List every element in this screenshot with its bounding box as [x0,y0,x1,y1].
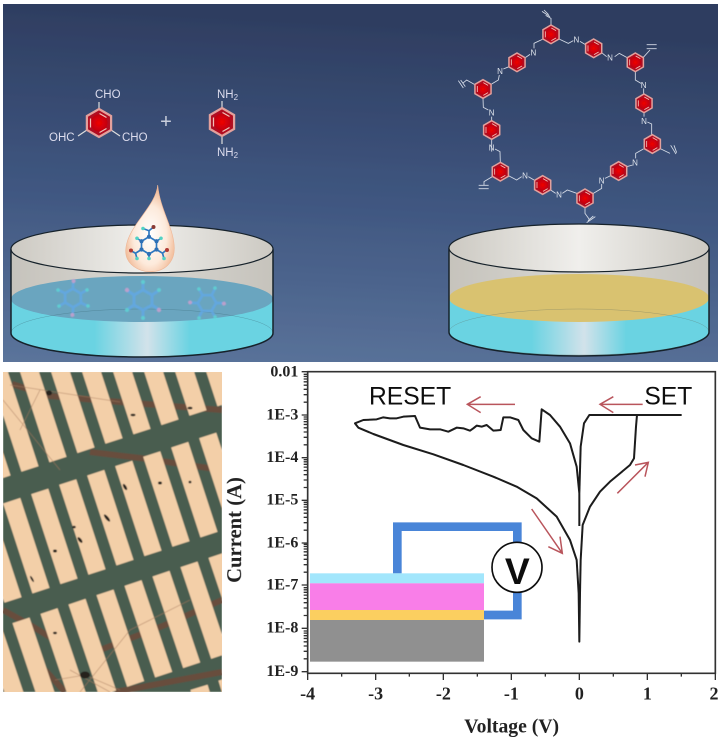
monomer: trialdehyde [49,89,148,144]
left dish with water [11,225,273,357]
floating molecules [49,275,230,327]
x tick labels: -4 [300,683,315,703]
y tick labels: 1E-8 [266,620,298,637]
y tick labels: 0.01 [270,364,298,381]
terminal bonds [458,10,677,223]
bottom electrode layer [310,610,484,620]
x tick labels: 0 [575,683,584,703]
I-V curve [355,409,682,642]
x axis title: Voltage (V) [464,715,559,737]
y ticks [302,372,715,680]
nitrogen labels: N [522,172,528,181]
electrode bars [3,372,222,692]
sweep arrows [467,397,648,553]
nitrogen labels: N [599,176,605,185]
monomer: trialdehyde: OHC [49,132,75,144]
monomer: diamine: 2 [234,151,239,160]
y tick labels [266,364,298,680]
right dish with film [449,224,709,356]
monomer: trialdehyde: CHO [95,89,121,101]
brown residue on substrate [3,384,222,692]
micrograph of electrode array [3,372,222,692]
x tick labels: 2 [709,683,718,703]
device schematic inset [310,527,542,662]
specks [29,390,193,678]
droplet [126,185,174,272]
monomer: diamine: NH [217,89,234,101]
axes frame [302,372,715,680]
x tick labels [300,683,718,703]
nitrogen labels: N [497,67,503,76]
yellow film [449,274,709,322]
COF hexagonal ring [458,10,677,223]
nitrogen labels: N [489,144,495,153]
monomer: trialdehyde: CHO [122,132,148,144]
y axis title: Current (A) [224,477,246,583]
panel: synthesis background [3,4,718,362]
y tick labels: 1E-7 [266,576,298,593]
monomer: diamine: NH [217,147,234,159]
y tick labels: 1E-5 [266,492,298,509]
monomer: diamine: 2 [234,93,239,102]
ring units [475,25,660,208]
nitrogen labels: N [632,158,638,167]
substrate layer [310,620,484,662]
nitrogen labels [489,35,647,199]
nitrogen labels: N [641,117,647,126]
scratches [3,385,190,692]
voltmeter symbol [492,542,542,592]
RESET label: RESET [369,383,451,410]
y tick labels: 1E-9 [266,663,298,680]
nitrogen labels: N [607,53,613,62]
voltmeter symbol: V [505,550,530,592]
SET label: SET [644,383,692,410]
nitrogen labels: N [573,35,579,44]
polymer layer [310,583,484,610]
top electrode layer [310,573,484,583]
nitrogen labels: N [530,49,536,58]
imine linkages [483,39,652,193]
x tick labels: 1 [643,683,652,703]
nitrogen labels: N [641,81,647,90]
y tick labels: 1E-4 [266,449,298,466]
I-V chart [224,364,718,737]
wire circuit [397,527,517,615]
x tick labels: -3 [368,683,383,703]
monomer: diamine [210,89,239,160]
plus sign: + [160,111,172,133]
nitrogen labels: N [556,190,562,199]
x tick labels: -2 [436,683,451,703]
y tick labels: 1E-3 [266,406,298,423]
nitrogen labels: N [489,108,495,117]
y tick labels: 1E-6 [266,534,298,551]
x tick labels: -1 [504,683,519,703]
water surface [11,276,273,322]
